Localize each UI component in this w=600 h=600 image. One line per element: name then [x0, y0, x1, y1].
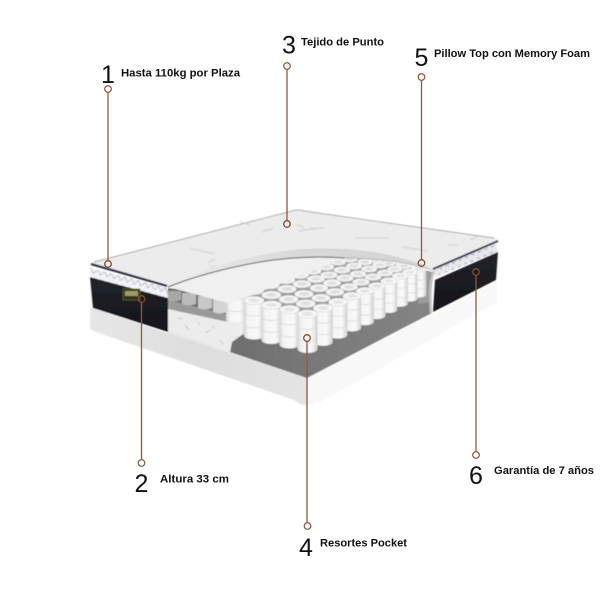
mattress illustration [90, 210, 498, 405]
callout 1: Hasta 110kg por Plaza [121, 68, 241, 80]
callout 3: 3 [282, 32, 296, 60]
lifted pillow layer underside [168, 257, 345, 303]
left side panel [90, 264, 168, 332]
callout 6: 6 [469, 462, 483, 490]
callout 2: Altura 33 cm [160, 474, 229, 486]
pocket springs rear rows [244, 253, 411, 317]
callout 5: 5 [414, 44, 428, 72]
callout 4: Resortes Pocket [320, 538, 407, 550]
side cut with short springs [167, 288, 245, 326]
knit pattern marks [190, 222, 478, 268]
callout 6 [469, 269, 594, 490]
logo badge [123, 289, 140, 300]
foam block [168, 309, 240, 352]
callout 3 [282, 32, 384, 227]
gray base panel [230, 296, 432, 378]
hidden-side spring behind foam [226, 292, 246, 335]
callout 2 [134, 296, 229, 498]
callout 1: 1 [101, 61, 115, 89]
pocket springs front row [298, 266, 426, 353]
callout 1 [101, 61, 241, 267]
callout 4 [299, 335, 407, 562]
callout 4: 4 [299, 534, 313, 562]
callout 2: 2 [134, 470, 148, 498]
right side panel [430, 241, 498, 313]
callout 6: Garantía de 7 años [494, 465, 594, 477]
arch band [168, 248, 433, 287]
callout 5 [414, 44, 590, 266]
callout 5: Pillow Top con Memory Foam [434, 48, 590, 60]
callout 3: Tejido de Punto [301, 36, 384, 48]
base layer [90, 281, 497, 405]
pocket springs left column [244, 296, 300, 348]
mattress top surface [91, 210, 498, 287]
